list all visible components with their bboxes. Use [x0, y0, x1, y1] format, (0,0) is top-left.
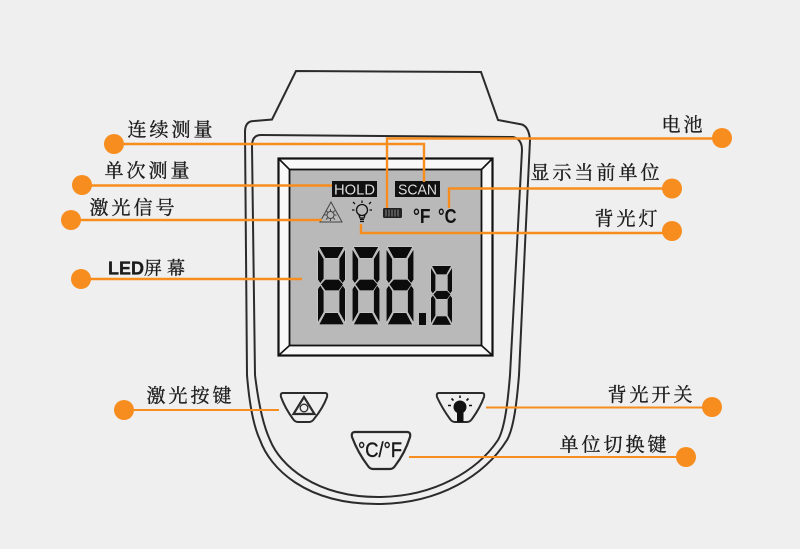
label: 显示当前单位	[530, 162, 663, 184]
degree Celsius indicator: °C	[438, 206, 456, 228]
small digit	[431, 266, 452, 325]
leader line	[114, 144, 424, 182]
icon: laser signal	[320, 202, 342, 222]
callout: LED屏幕	[71, 258, 302, 289]
button: unit switch: °C/°F	[358, 439, 402, 462]
digit 3	[386, 247, 413, 324]
callout: 激光信号	[61, 197, 322, 230]
LCD screen	[278, 158, 492, 356]
screen display area	[290, 170, 482, 346]
leader line	[71, 219, 322, 221]
callout: 单次测量	[72, 160, 332, 195]
decimal point	[419, 313, 426, 325]
callout: 背光开关	[486, 384, 722, 417]
button: backlight	[437, 393, 484, 422]
degree Fahrenheit indicator: °F	[413, 206, 430, 228]
button: unit switch	[352, 432, 410, 469]
label: 单次测量	[104, 160, 193, 182]
label: LED	[108, 258, 144, 278]
device body outer outline	[245, 71, 530, 504]
digit 1	[318, 247, 345, 324]
marker	[676, 447, 696, 467]
callout: 电池	[387, 114, 732, 208]
bezel corners	[278, 158, 492, 356]
HOLD indicator: HOLD	[334, 182, 375, 198]
label: 单位切换键	[560, 434, 670, 456]
marker	[72, 175, 92, 195]
callout: 激光按键	[114, 385, 279, 420]
label: 电池	[662, 114, 706, 136]
label: 连续测量	[128, 119, 216, 141]
marker	[71, 269, 91, 289]
device body inner outline	[252, 135, 522, 497]
icon: battery	[383, 208, 402, 218]
marker	[662, 178, 682, 198]
label: 激光按键	[146, 385, 235, 407]
screen bezel	[278, 158, 492, 356]
leader line	[449, 188, 672, 208]
leader line	[81, 278, 302, 280]
marker	[61, 210, 81, 230]
digit 2	[352, 247, 379, 324]
marker	[662, 221, 682, 241]
callout: 背光灯	[361, 208, 682, 241]
icon: backlight bulb	[352, 200, 372, 222]
marker	[104, 134, 124, 154]
leader line	[124, 409, 279, 411]
seven-segment reading 888.8	[318, 247, 452, 325]
leader line	[387, 138, 722, 208]
marker	[702, 397, 722, 417]
marker	[712, 128, 732, 148]
SCAN indicator: SCAN	[398, 182, 437, 198]
label: 背光灯	[594, 208, 661, 230]
leader line	[82, 184, 332, 187]
leader line	[361, 224, 672, 233]
callout: 连续测量	[104, 119, 424, 182]
label: 激光信号	[90, 197, 178, 219]
marker	[114, 400, 134, 420]
callout: 显示当前单位	[449, 162, 682, 208]
label: 背光开关	[608, 384, 696, 406]
button: laser	[281, 393, 327, 422]
label: 屏幕	[144, 258, 190, 278]
leader line	[409, 456, 686, 458]
leader line	[486, 406, 712, 408]
callout: 单位切换键	[409, 434, 696, 467]
